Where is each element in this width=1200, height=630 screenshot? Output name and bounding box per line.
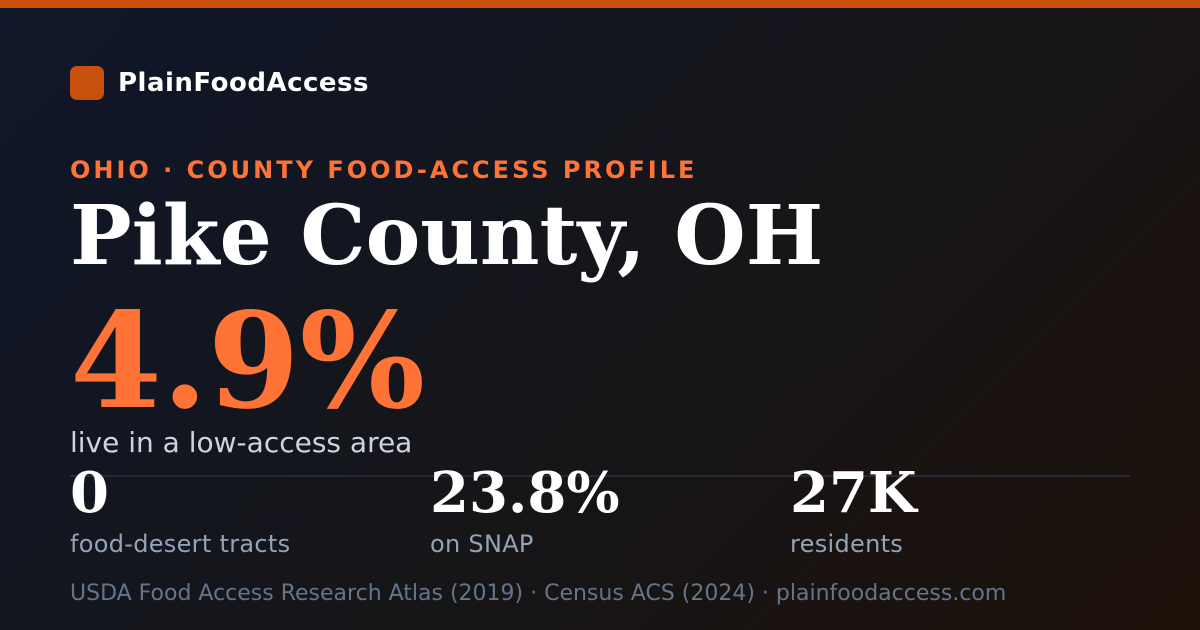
stat: on SNAP: 23.8%	[430, 460, 620, 526]
divider	[70, 475, 1130, 477]
stat: food-desert tracts: 0	[70, 460, 109, 526]
eyebrow: OHIO · COUNTY FOOD-ACCESS PROFILE	[70, 156, 697, 184]
icon: brand square	[70, 66, 104, 100]
stat: residents: 27K	[790, 460, 917, 526]
brand	[70, 66, 369, 100]
brand name: PlainFoodAccess	[118, 68, 369, 98]
stat: food-desert tracts	[70, 460, 290, 558]
stat: on SNAP: on SNAP	[430, 530, 534, 558]
stat: residents: residents	[790, 530, 903, 558]
source footer: USDA Food Access Research Atlas (2019) · Census ACS (2024) · plainfoodaccess.com	[70, 581, 1006, 606]
headline label: live in a low-access area	[70, 426, 412, 459]
stat: residents	[790, 460, 918, 558]
title: Pike County, OH	[70, 188, 823, 284]
headline stat: 4.9%	[70, 284, 425, 439]
stat: food-desert tracts: food-desert tracts	[70, 530, 290, 558]
stat: on SNAP	[430, 460, 620, 558]
top accent bar	[0, 0, 1200, 8]
